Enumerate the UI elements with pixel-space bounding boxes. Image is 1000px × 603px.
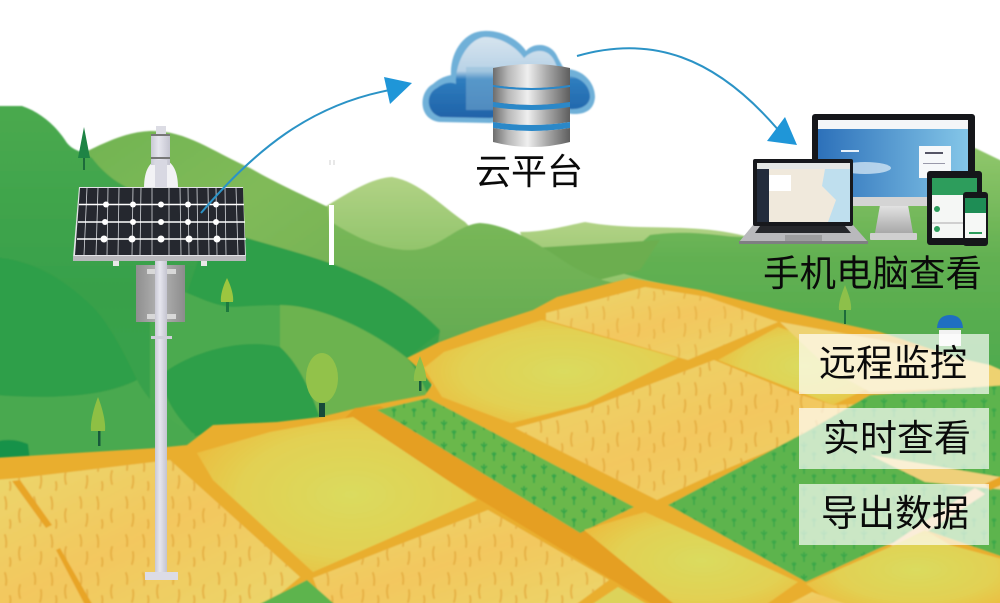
label box: real-time viewing: 实时查看 (823, 418, 971, 459)
tree: round (306, 353, 338, 417)
heading: cloud platform: 云平台 (475, 151, 583, 192)
camera dome (144, 126, 178, 188)
field: bottom right yellow (806, 530, 1000, 603)
tree: small yellow-green (221, 278, 233, 312)
tree: dark pine (78, 127, 90, 170)
arrow: station to cloud (201, 77, 412, 213)
arrow: cloud to devices (577, 48, 797, 145)
field: top stalks (546, 287, 778, 360)
field: large yellow top (424, 320, 678, 423)
field: green sprouts left (377, 398, 634, 533)
field: large yellow (197, 417, 477, 572)
database (493, 64, 570, 147)
blue dome sensor (937, 315, 963, 346)
cloud (423, 31, 595, 123)
tree: lower left (91, 397, 105, 446)
label box: remote monitoring (799, 334, 989, 394)
field: center stalks (515, 360, 898, 500)
field: green sprouts right (668, 385, 1000, 582)
label box: export data: 导出数据 (821, 493, 969, 534)
phone (963, 192, 988, 246)
main road (345, 406, 700, 603)
desktop monitor (812, 114, 975, 240)
field: bottom center yellow (584, 512, 798, 603)
tablet (927, 171, 982, 245)
icon: cloud database (423, 31, 595, 147)
laptop (739, 159, 868, 244)
wind turbine mast (329, 160, 335, 265)
tree: right (839, 285, 851, 324)
tree: near field edge (414, 356, 426, 391)
equipment box (136, 265, 185, 322)
background hills (0, 106, 1000, 470)
fields (0, 278, 1000, 603)
solar panel (73, 187, 246, 266)
heading: phone and computer viewing: 手机电脑查看 (763, 253, 982, 294)
field: lower center stalks (313, 510, 609, 603)
label box: real-time viewing (799, 408, 989, 469)
icon: devices (739, 114, 988, 246)
monitoring pole (136, 126, 185, 580)
label box: export data (799, 484, 989, 545)
field: lower left stalks (0, 460, 300, 603)
label box: remote monitoring: 远程监控 (819, 343, 967, 384)
